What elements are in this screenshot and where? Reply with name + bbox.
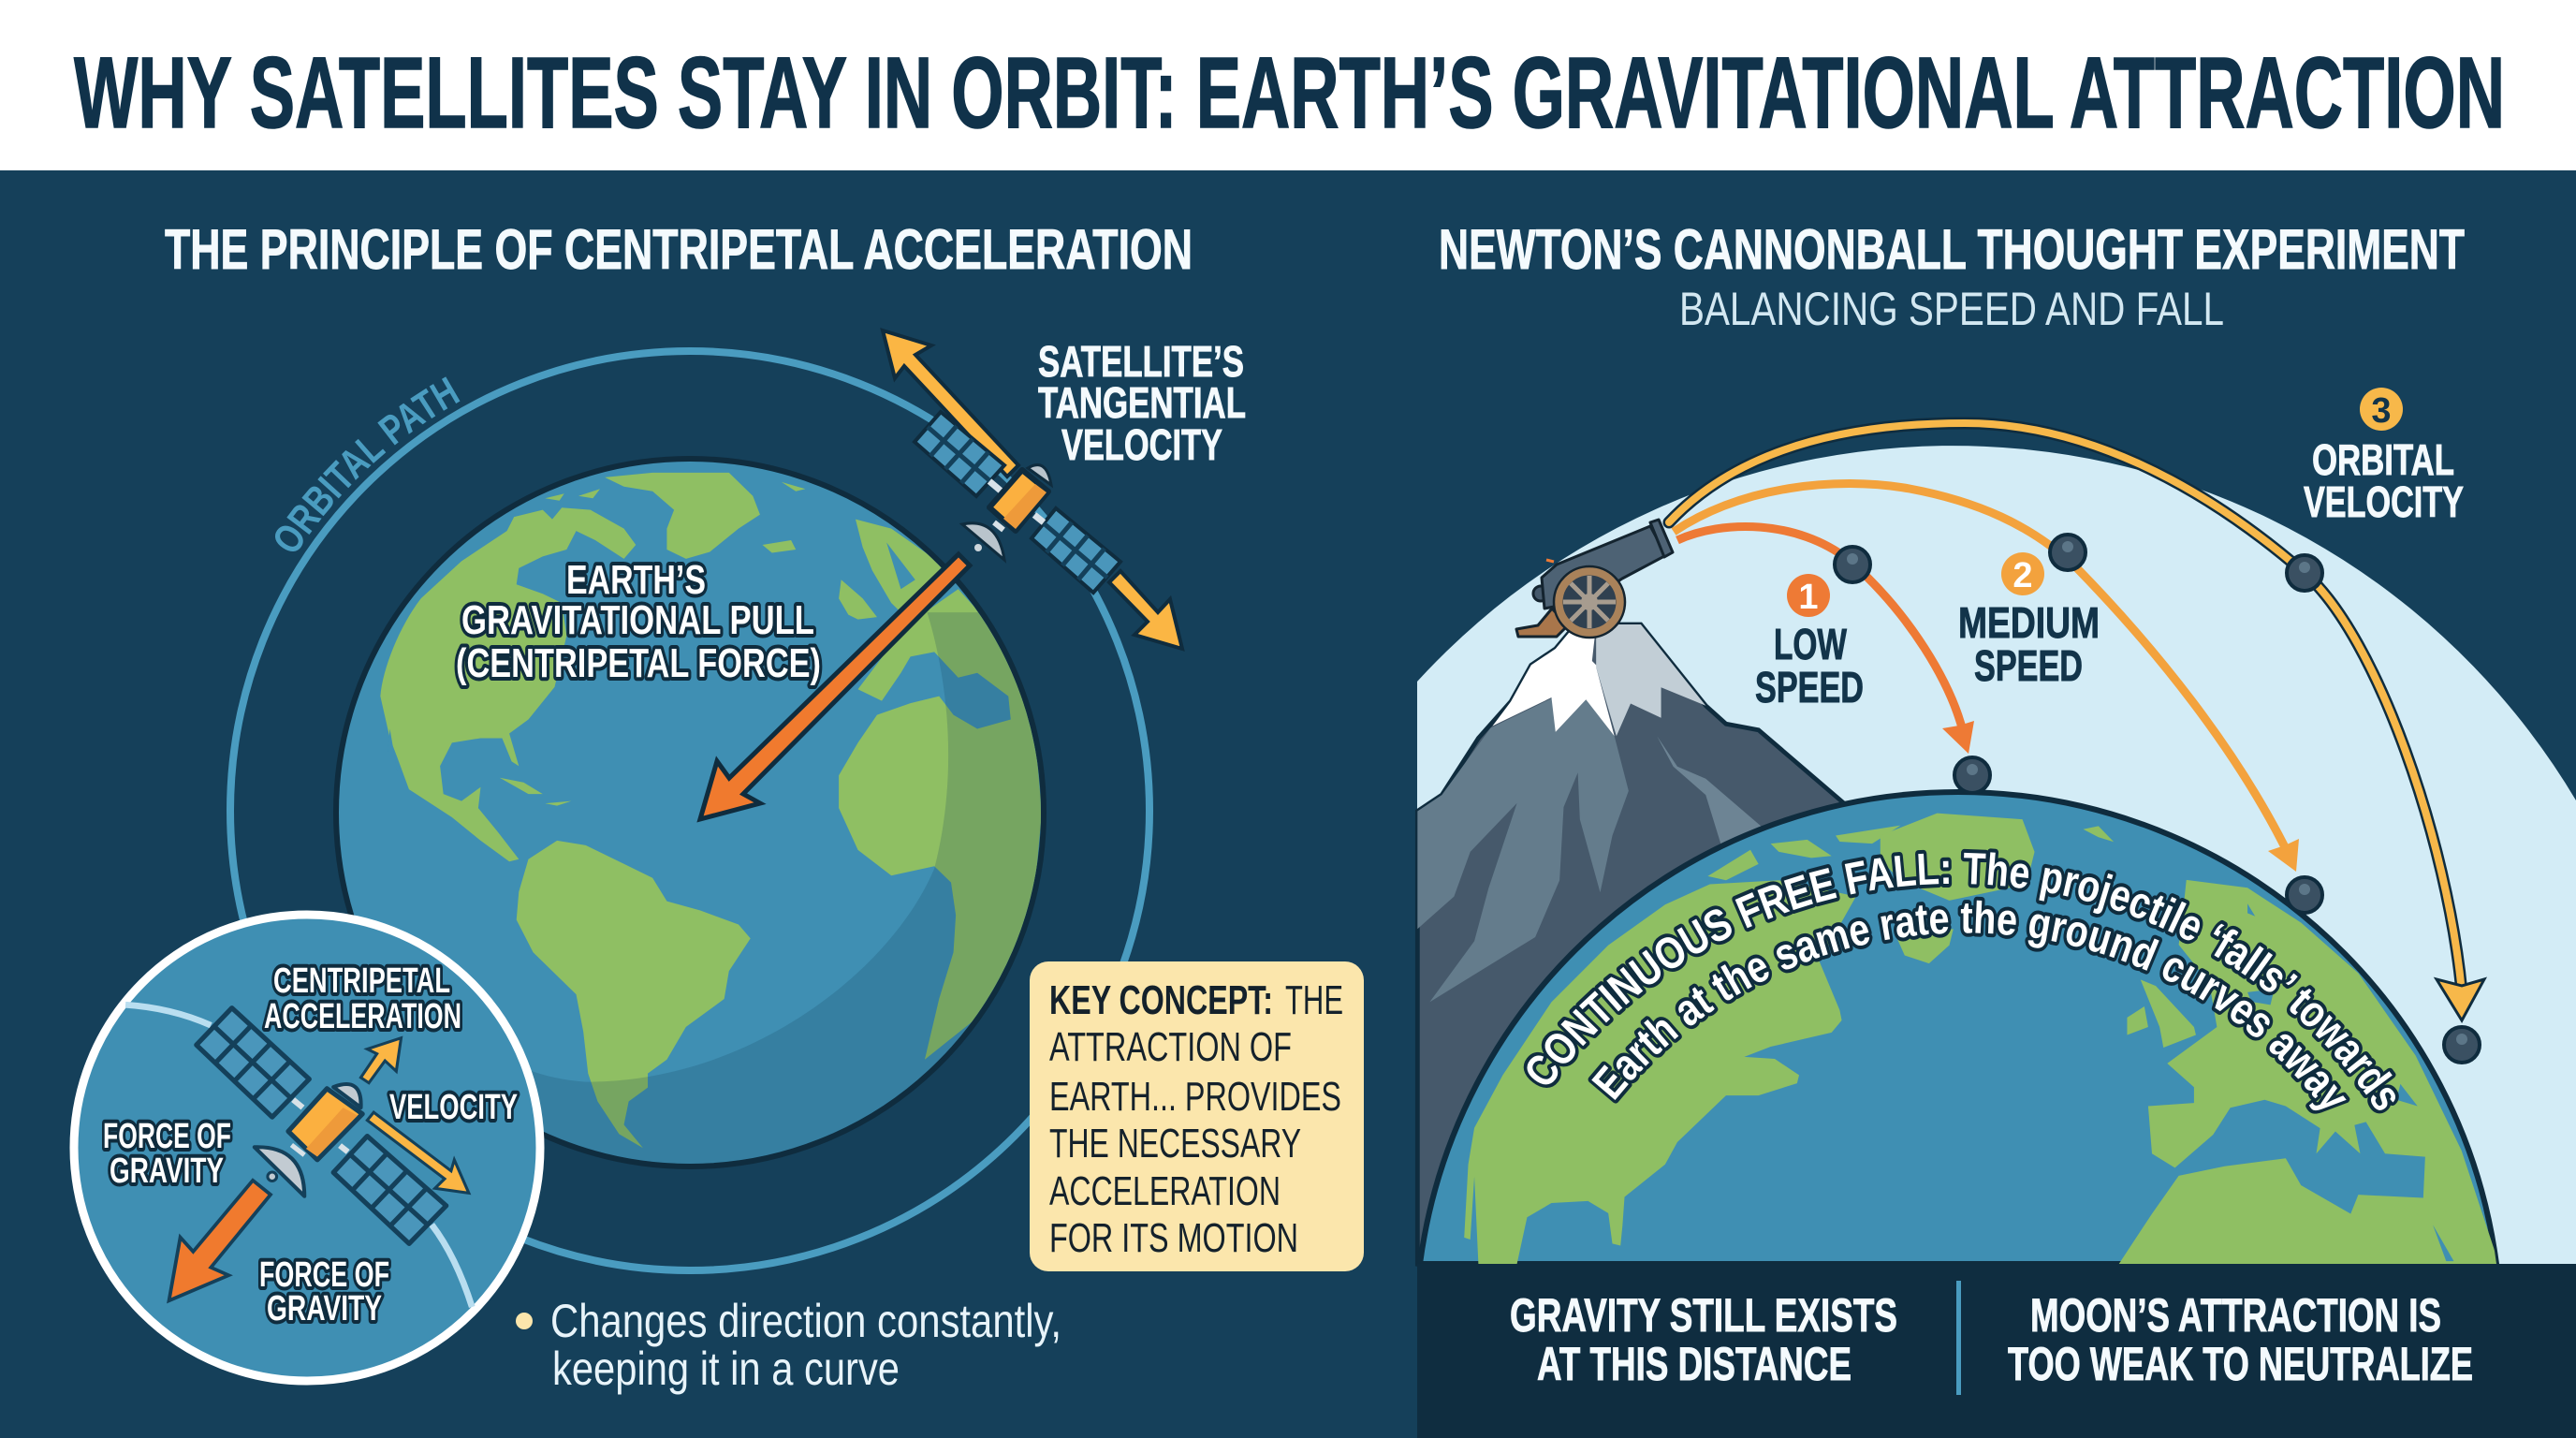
inset arrows xyxy=(360,1038,402,1083)
badge and label: medium speed: SPEED xyxy=(1974,641,2083,690)
key concept callout: ATTRACTION OF xyxy=(1049,1024,1292,1070)
dish small xyxy=(1028,465,1051,485)
americas landmass xyxy=(1464,814,2035,1264)
badge and label: medium speed: 2 xyxy=(2012,556,2033,595)
mountain xyxy=(1417,624,1844,1264)
orbital path label: ORBITAL PATH xyxy=(275,376,461,551)
inset solar panels xyxy=(197,1008,446,1243)
earth's gravitational pull label: (CENTRIPETAL FORCE) xyxy=(456,640,821,686)
badge and label: medium speed: MEDIUM xyxy=(1958,598,2100,647)
badge and label: low speed: 1 xyxy=(1798,578,1819,617)
bullet note: keeping it in a curve xyxy=(552,1343,900,1395)
curved continuous free fall text: CONTINUOUS FREE FALL: The projectile ‘falls’ towards xyxy=(1524,848,2399,1114)
bottom takeaway bar: GRAVITY STILL EXISTS xyxy=(1510,1289,1897,1342)
bottom takeaway bar xyxy=(1417,1264,2576,1438)
satellite's tangential velocity label: TANGENTIAL xyxy=(1038,378,1246,427)
key concept callout: THE NECESSARY xyxy=(1049,1121,1301,1167)
badge and label: medium speed xyxy=(1958,552,2100,690)
earth globe xyxy=(336,459,1082,1195)
curved continuous free fall text: Earth at the same rate the ground curves away xyxy=(1588,897,2349,1114)
sky disc xyxy=(1417,446,2576,1264)
bullet note xyxy=(516,1295,1061,1395)
right panel heading: BALANCING SPEED AND FALL xyxy=(1679,283,2224,335)
cannon xyxy=(1516,520,1673,638)
badge and label: orbital velocity: VELOCITY xyxy=(2304,477,2464,526)
badge and label: orbital velocity xyxy=(2304,388,2464,526)
inset: satellite force detail: FORCE OF xyxy=(259,1255,389,1295)
title band xyxy=(0,0,2576,170)
bottom takeaway bar: AT THIS DISTANCE xyxy=(1537,1338,1852,1390)
orbital path ring xyxy=(230,351,1149,1270)
earth's gravitational pull label: EARTH’S xyxy=(566,557,706,603)
satellite's tangential velocity label xyxy=(1038,337,1246,469)
trajectory: medium speed xyxy=(1674,484,2299,872)
badge and label: low speed xyxy=(1755,574,1864,712)
europe and africa landmass xyxy=(2084,826,2499,1266)
cannonballs xyxy=(1835,535,2480,1063)
key concept callout: ACCELERATION xyxy=(1049,1168,1281,1214)
solar panel upper xyxy=(915,412,1004,496)
arrow: tangential velocity down xyxy=(1109,571,1182,649)
arrow: gravitational pull xyxy=(700,554,970,819)
inset orbit line xyxy=(125,1005,472,1307)
left panel heading: THE PRINCIPLE OF CENTRIPETAL ACCELERATION xyxy=(165,218,1193,281)
solar panel lower xyxy=(1032,508,1120,593)
key concept callout: EARTH... PROVIDES xyxy=(1049,1074,1341,1120)
inset: satellite force detail: GRAVITY xyxy=(110,1152,224,1191)
bottom takeaway bar: MOON’S ATTRACTION IS xyxy=(2030,1289,2441,1342)
badge and label: orbital velocity: 3 xyxy=(2371,391,2392,431)
inset: satellite force detail: ACCELERATION xyxy=(264,997,461,1036)
inset: satellite force detail xyxy=(74,915,540,1381)
arrow: tangential velocity up xyxy=(883,330,1018,477)
key concept callout: KEY CONCEPT: xyxy=(1049,977,1273,1023)
panel: newton's cannonball xyxy=(1415,218,2576,1438)
key concept callout: FOR ITS MOTION xyxy=(1049,1215,1298,1261)
badge and label: orbital velocity: ORBITAL xyxy=(2312,435,2454,484)
trajectory: low speed xyxy=(1677,526,1974,754)
panel: centripetal acceleration xyxy=(69,218,1364,1395)
inset: satellite force detail: VELOCITY xyxy=(389,1088,518,1127)
satellite's tangential velocity label: SATELLITE’S xyxy=(1038,337,1244,386)
inset satellite body xyxy=(255,1084,362,1196)
earth's gravitational pull label xyxy=(456,557,821,686)
earth shadow xyxy=(532,612,1041,1164)
key concept callout xyxy=(1030,961,1364,1271)
earth's gravitational pull label: GRAVITATIONAL PULL xyxy=(461,597,814,643)
bullet note: Changes direction constantly, xyxy=(550,1295,1061,1347)
key concept callout: THE xyxy=(1285,977,1343,1023)
earth curved horizon xyxy=(1420,792,2499,1266)
inset: satellite force detail: GRAVITY xyxy=(267,1289,382,1328)
badge and label: low speed: SPEED xyxy=(1755,663,1864,712)
inset labels: CENTRIPETAL xyxy=(273,961,450,1001)
satellite body xyxy=(989,470,1048,531)
trajectory: orbital velocity xyxy=(1669,423,2484,1020)
satellite's tangential velocity label: VELOCITY xyxy=(1061,420,1222,469)
inset: satellite force detail: FORCE OF xyxy=(103,1117,231,1156)
dish large xyxy=(962,523,1004,560)
satellite xyxy=(915,412,1120,593)
badge and label: low speed: LOW xyxy=(1774,620,1847,668)
right panel heading xyxy=(1439,218,2465,335)
